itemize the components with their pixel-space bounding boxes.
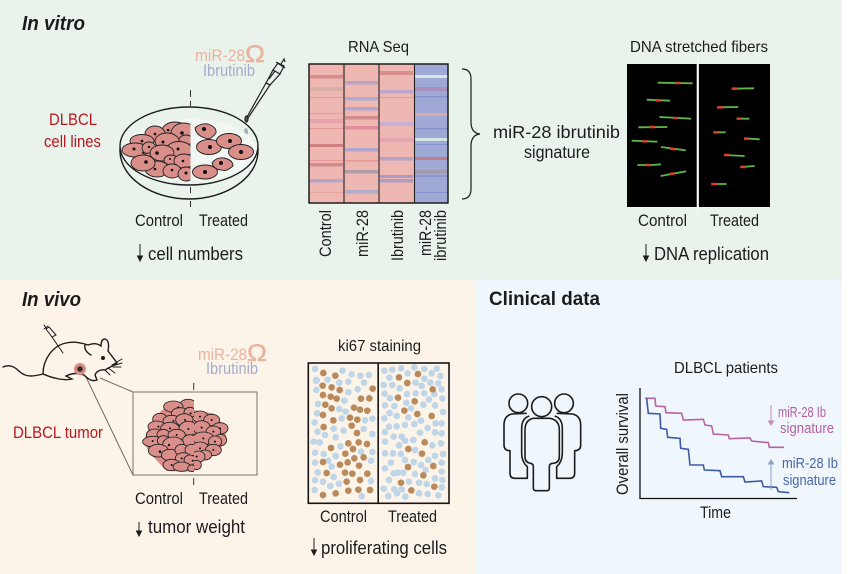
result: cell numbers: cell numbers — [148, 244, 243, 264]
label: in vivo treatment: miR-28 — [198, 345, 247, 364]
label: control: Control — [135, 211, 183, 230]
label: treatment: Ω — [245, 41, 265, 68]
annotation: up signature: miR-28 Ib — [782, 455, 838, 472]
label: DLBCL tumor: DLBCL tumor — [13, 423, 103, 442]
column 4 bands — [415, 75, 448, 193]
heading: in vivo: In vivo — [22, 289, 81, 311]
icon: petri dish with cells — [120, 90, 258, 207]
label: signature — [493, 122, 620, 162]
connector lines — [86, 377, 133, 475]
heatmap column labels: Control — [316, 210, 335, 257]
x-axis label: Time — [700, 503, 731, 522]
label: signature: miR-28 ibrutinib — [493, 122, 620, 142]
panel: clinical data — [475, 280, 842, 574]
fibers: treated — [711, 88, 760, 184]
brace — [462, 69, 480, 199]
annotation: down signature: signature — [780, 420, 834, 437]
tumor inset box — [133, 392, 257, 475]
label: in vivo treatment: Ibrutinib — [206, 359, 258, 378]
heatmap column labels — [316, 210, 450, 261]
label: tumor control: Control — [135, 489, 183, 508]
y-axis label: Overall survival — [613, 393, 632, 495]
label: treatment — [195, 41, 265, 80]
icon: tumor cell mass — [143, 383, 228, 485]
label: fibers control: Control — [638, 211, 687, 230]
fibers: control — [632, 83, 693, 176]
ki67 control cells — [310, 366, 376, 499]
label: ki67 control: Control — [320, 507, 367, 526]
icon: group of people — [504, 394, 581, 491]
curve: low signature — [645, 398, 784, 447]
heading: in vitro: In vitro — [22, 13, 85, 35]
label: tumor treated: Treated — [199, 489, 248, 508]
label: treatment: miR-28 — [195, 46, 245, 65]
result: tumor weight: tumor weight — [148, 517, 245, 537]
chart: DNA fibers — [627, 57, 770, 214]
column 2 bands — [345, 81, 378, 194]
label: treated: Treated — [199, 211, 248, 230]
label: treatment: Ibrutinib — [203, 61, 255, 80]
label: DLBCL cell lines: cell lines — [44, 132, 101, 151]
chart axes — [640, 388, 797, 498]
heatmap column labels: miR-28 — [353, 210, 372, 257]
panel: in vitro — [0, 0, 842, 280]
heatmap column labels: ibrutinib — [431, 210, 450, 261]
annotation: down signature — [768, 404, 834, 437]
column 3 bands — [380, 71, 413, 182]
column 1 bands — [310, 75, 343, 193]
panel: in vivo — [0, 280, 475, 574]
chart: ki67 staining — [308, 363, 449, 503]
label: DLBCL cell lines: DLBCL — [49, 110, 97, 129]
chart: RNA-seq heatmap — [309, 64, 448, 203]
heatmap column labels: Ibrutinib — [388, 210, 407, 261]
ki67 treated cells — [380, 364, 446, 500]
heading: DLBCL patients: DLBCL patients — [674, 360, 778, 377]
label: ki67 treated: Treated — [388, 507, 437, 526]
label: DLBCL cell lines — [44, 110, 101, 151]
annotation: up signature: signature — [783, 472, 836, 489]
annotation: up signature — [768, 455, 838, 490]
curve: high signature — [647, 398, 789, 493]
annotation: down signature: miR-28 Ib — [778, 404, 826, 421]
label: in vivo treatment: Ω — [247, 340, 267, 367]
label: signature: signature — [524, 142, 590, 162]
heading: ki67 staining: ki67 staining — [338, 338, 421, 355]
icon: mouse with syringe — [3, 325, 122, 381]
heading: RNA Seq: RNA Seq — [348, 39, 409, 56]
heading: clinical data: Clinical data — [489, 289, 600, 310]
chart: survival curves — [613, 388, 838, 522]
label: fibers treated: Treated — [710, 211, 759, 230]
result: proliferating cells: proliferating cells — [321, 538, 447, 558]
label: in vivo treatment — [198, 340, 267, 378]
result: DNA replication: DNA replication — [654, 244, 769, 264]
heading: DNA stretched fibers: DNA stretched fibers — [630, 39, 768, 56]
heatmap column labels: miR-28 — [416, 210, 435, 256]
icon: pipette — [243, 59, 285, 145]
